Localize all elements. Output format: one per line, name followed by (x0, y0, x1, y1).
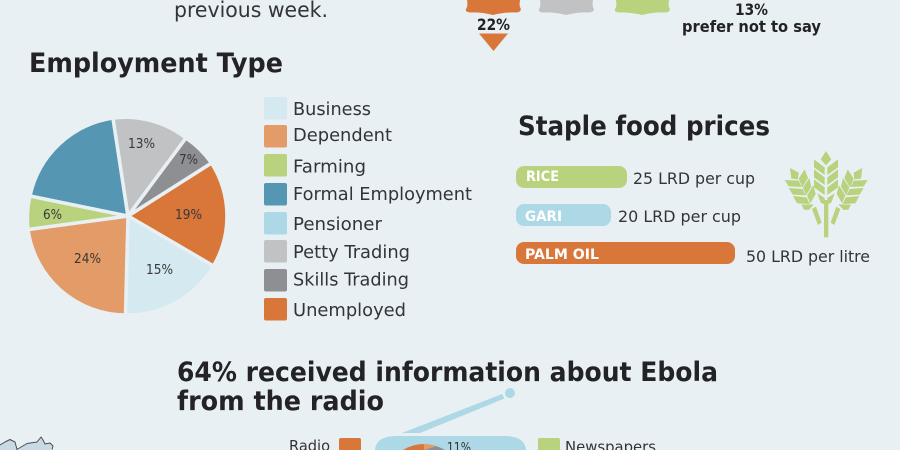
slice: farming (27, 196, 128, 230)
label: 13: 13% (128, 137, 155, 152)
icon: down arrow (479, 34, 508, 51)
legend item: business (264, 97, 371, 120)
label: prefer not to say: prefer not to say (682, 17, 822, 36)
legend item: pensioner (264, 212, 383, 235)
radio antenna tip (505, 388, 515, 398)
legend item: dependent: Dependent (293, 125, 392, 146)
legend item: pensioner: Pensioner (293, 214, 383, 235)
label: 24: 24% (74, 252, 101, 267)
radio body (375, 436, 526, 450)
bar: palm oil (516, 242, 735, 264)
legend item: business: Business (293, 99, 371, 120)
dial orange segment (403, 444, 424, 450)
dial light orange segment (424, 444, 436, 450)
value: rice price: 25 LRD per cup (633, 169, 755, 188)
slice: formal employment (30, 118, 128, 216)
legend item: farming: Farming (293, 156, 366, 178)
value: palm oil price: 50 LRD per litre (746, 247, 870, 266)
label: 7: 7% (179, 153, 198, 168)
dial grey segment (424, 446, 445, 450)
bar: rice (516, 166, 627, 188)
bar: rice: RICE (526, 169, 559, 185)
heading: staple food prices: Staple food prices (518, 111, 770, 142)
panel: staple food price bars (516, 166, 870, 266)
legend item: radio (289, 437, 361, 450)
icon: wheat (785, 151, 868, 237)
icon: orange speech shape (466, 0, 521, 15)
value: gari price: 20 LRD per cup (618, 207, 741, 226)
bar: gari: GARI (525, 209, 562, 225)
label: 19: 19% (175, 208, 202, 223)
radio antenna (402, 394, 504, 433)
icon: green speech shape (615, 0, 670, 15)
legend item: formal employment: Formal Employment (293, 184, 472, 205)
label: 6: 6% (43, 208, 62, 223)
legend item: skills trading: Skills Trading (293, 270, 409, 290)
slice: dependent (28, 216, 128, 315)
bar: gari (516, 204, 611, 226)
legend item: unemployed: Unemployed (293, 300, 406, 321)
radio dial donut chart (403, 444, 445, 450)
panel: top survey result shapes (466, 0, 822, 51)
heading line two: from the radio (177, 386, 384, 417)
heading: employment type: Employment Type (29, 48, 283, 79)
heading line one: 64% received information about Ebola (177, 357, 718, 388)
icon: radio graphic (375, 388, 526, 450)
slice: business (126, 216, 214, 315)
pie percentage labels (43, 137, 202, 278)
legend item: farming (264, 154, 366, 178)
icon: grey speech shape (539, 0, 594, 15)
legend: employment type (264, 97, 472, 321)
slice: unemployed (128, 163, 227, 266)
legend item: petty trading: Petty Trading (293, 242, 410, 263)
heading: radio information (177, 357, 718, 417)
slice: petty trading (113, 117, 186, 216)
map outline (0, 437, 53, 450)
label: 22 percent: 22% (477, 15, 510, 34)
label: 13 percent: 13% (735, 0, 768, 19)
label: 15: 15% (146, 263, 173, 278)
bar: palm oil: PALM OIL (525, 247, 599, 263)
slice: skills trading (128, 138, 212, 216)
chart: employment pie (27, 117, 227, 315)
